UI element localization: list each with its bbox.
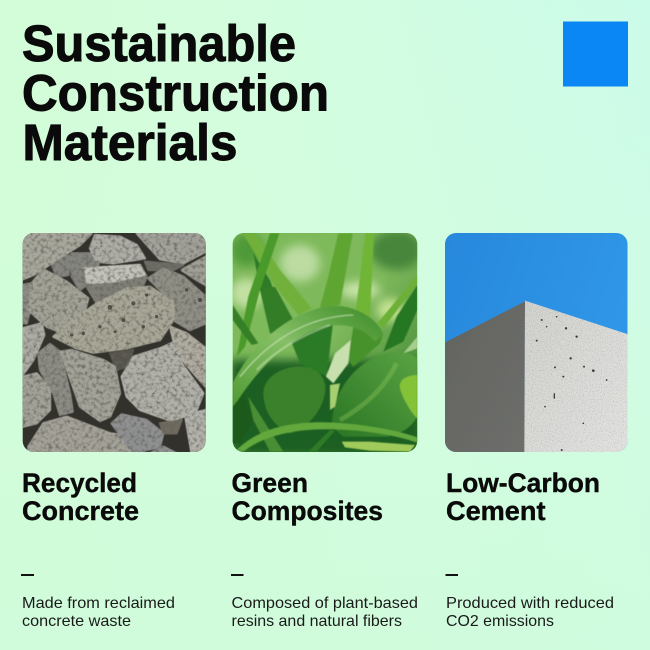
card text: recycled concrete: Recycled: [22, 468, 137, 498]
card text: low-carbon cement: Cement: [446, 496, 546, 526]
title: [22, 15, 329, 171]
card text: recycled concrete: Made from reclaimed: [22, 595, 175, 612]
card text: recycled concrete: [21, 468, 175, 630]
card text: green composites: Composed of plant-based: [232, 595, 418, 612]
card text: green composites: Composites: [232, 496, 383, 526]
card text: green composites: Green: [232, 468, 308, 498]
card text: recycled concrete: Concrete: [22, 496, 139, 526]
panel: recycled concrete photo: [22, 233, 206, 453]
card text: recycled concrete: concrete waste: [22, 613, 131, 630]
card text: green composites: [231, 468, 418, 630]
title: Construction: [22, 65, 329, 122]
card text: low-carbon cement: CO2 emissions: [446, 613, 554, 630]
card text: low-carbon cement: [446, 468, 614, 630]
title: Sustainable: [22, 15, 296, 72]
title: Materials: [22, 114, 238, 171]
panel: green composites photo: [230, 230, 423, 457]
panel: low-carbon cement photo: [443, 233, 630, 453]
card text: green composites: resins and natural fibers: [232, 613, 402, 630]
blue square accent: [563, 22, 628, 86]
card text: low-carbon cement: Produced with reduced: [446, 595, 614, 612]
card text: low-carbon cement: Low-Carbon: [446, 468, 600, 498]
